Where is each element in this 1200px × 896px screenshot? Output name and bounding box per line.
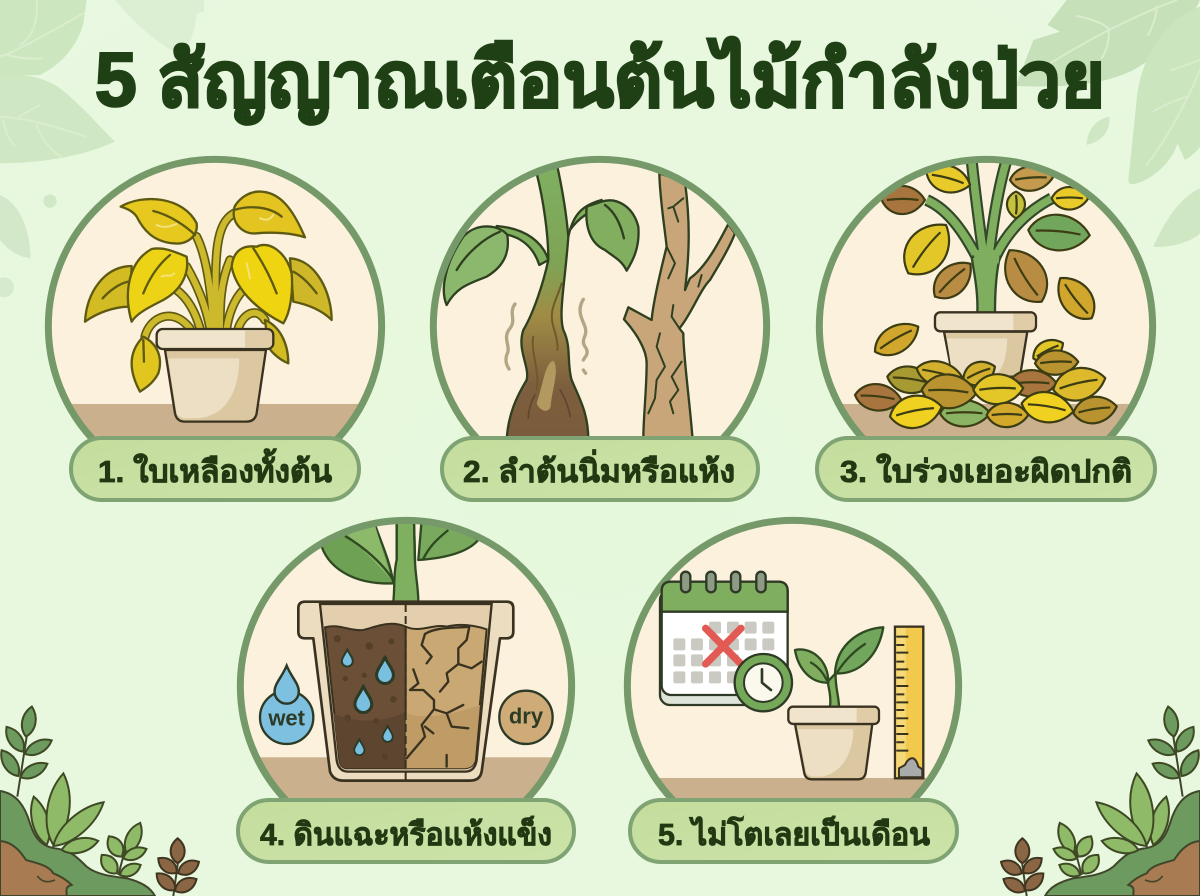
seedling in pot <box>788 627 883 779</box>
label pill 2 <box>442 438 758 500</box>
panel 4: wet or hard soil <box>230 520 590 862</box>
calendar <box>660 572 788 705</box>
panel 3: leaf drop <box>800 159 1170 504</box>
label pill 3 <box>817 438 1155 500</box>
illustration: soft stem and cracked dry trunk <box>430 156 770 436</box>
wet badge <box>260 666 313 744</box>
panel 5: no growth for months <box>615 520 975 878</box>
label pill 5 <box>630 800 957 862</box>
label pill 1 <box>71 438 359 500</box>
label pill 4: 4. ดินแฉะหรือแห้งแข็ง <box>260 815 552 852</box>
label pill 1: 1. ใบเหลืองทั้งต้น <box>98 448 332 489</box>
panel 2: soft or dry trunk <box>433 159 767 500</box>
illustration: pot cross-section with wet and dry soil <box>236 516 576 798</box>
label pill 3: 3. ใบร่วงเยอะผิดปกติ <box>840 453 1132 489</box>
clock <box>735 654 792 711</box>
ruler <box>895 627 923 778</box>
dry badge: dry <box>509 703 544 728</box>
decorative plants: bottom right <box>998 705 1200 896</box>
label pill 4 <box>238 800 574 862</box>
decorative plants: bottom left <box>0 705 202 896</box>
label pill 2: 2. ลำต้นนิ่มหรือแห้ง <box>463 449 735 489</box>
decorative leaves: top right <box>1016 0 1200 247</box>
label pill 5: 5. ไม่โตเลยเป็นเดือน <box>658 815 930 852</box>
illustration: calendar, clock, seedling and ruler <box>624 516 962 798</box>
decorative leaves: top left <box>0 0 204 297</box>
panel 1: yellow leaves <box>30 159 400 504</box>
illustration: yellowing potted plant <box>44 156 386 439</box>
illustration: plant dropping leaves onto a pile <box>816 156 1156 436</box>
title: 5 สัญญาณเตือนต้นไม้กำลังป่วย <box>95 36 1105 125</box>
dry badge <box>499 691 553 744</box>
wet badge: wet <box>267 705 306 730</box>
